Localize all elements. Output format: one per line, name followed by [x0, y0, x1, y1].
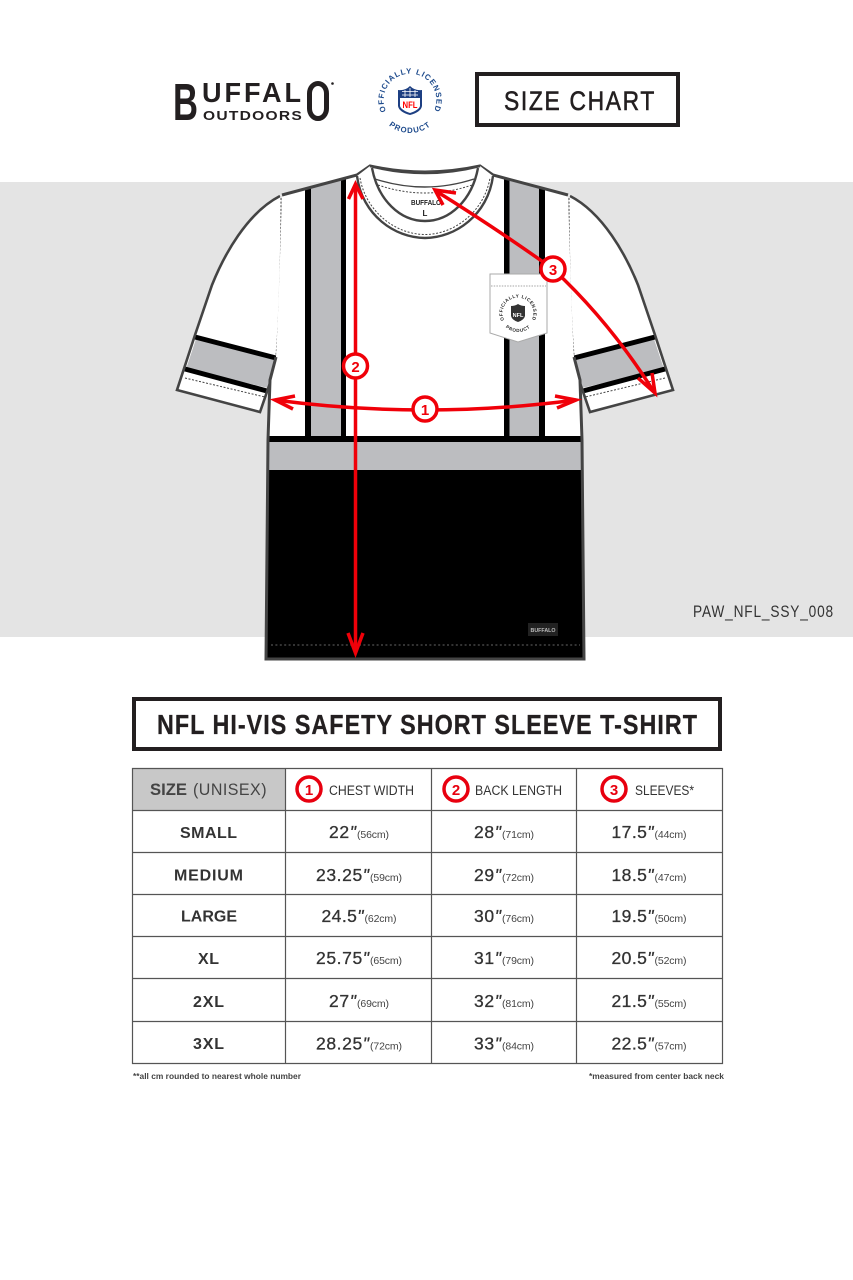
row: small: [180, 822, 686, 842]
row: medium: (72cm): [502, 872, 534, 884]
logo: NFL officially licensed product badge: OFFICIALLY LICENSED: [378, 68, 442, 112]
row: large: [181, 906, 686, 926]
arrow 2: back length: 2: [351, 359, 360, 376]
chest pocket: [490, 274, 548, 342]
size table: [132, 768, 722, 1064]
logo: Buffalo Outdoors: [173, 74, 334, 132]
heading: size chart: [477, 74, 678, 125]
row: small: 22": [329, 822, 357, 842]
row: large: (76cm): [502, 913, 534, 925]
row: 3xl: (72cm): [370, 1040, 402, 1052]
row: 2xl: 21.5": [612, 991, 654, 1011]
row: 3xl: 33": [474, 1034, 502, 1054]
table header: 2: [452, 782, 460, 799]
row: large: 30": [474, 906, 502, 926]
footnote: sleeve measurement: *measured from center back neck: [589, 1072, 725, 1081]
neck tag: L: [423, 209, 428, 218]
row: xl: (52cm): [654, 955, 686, 967]
arrow 3: sleeve length: [435, 190, 655, 393]
hem label: BUFFALO: [530, 628, 556, 634]
row: xl: (65cm): [370, 955, 402, 967]
logo: Buffalo Outdoors: UFFAL: [202, 77, 304, 108]
collar: [357, 166, 493, 238]
row: xl: XL: [198, 951, 219, 968]
logo: NFL officially licensed product badge: [378, 68, 442, 133]
row: 2xl: 27": [329, 991, 357, 1011]
footnote: rounding: **all cm rounded to nearest whole number: [133, 1072, 301, 1081]
grey backdrop band: [0, 182, 853, 637]
heading: size chart: SIZE CHART: [504, 86, 656, 116]
row: large: (62cm): [364, 913, 396, 925]
row: small: (71cm): [502, 829, 534, 841]
arrow 1: chest width: [275, 396, 576, 421]
row: 3xl: 28.25": [316, 1034, 370, 1054]
left sleeve: [177, 196, 281, 412]
row: small: 28": [474, 822, 502, 842]
row: medium: MEDIUM: [174, 868, 243, 884]
table header: 3: [610, 782, 618, 799]
table header: SLEEVES*: [635, 783, 695, 798]
shirt body: [266, 166, 584, 659]
product title: [134, 699, 720, 749]
right sleeve: [569, 196, 673, 412]
row: medium: [174, 865, 686, 885]
table header: SIZE: [150, 780, 187, 799]
row: 2xl: (69cm): [357, 998, 389, 1010]
row: 2xl: 32": [474, 991, 502, 1011]
arrow 2: back length: [344, 184, 368, 653]
row: medium: (47cm): [654, 872, 686, 884]
t-shirt illustration: [175, 164, 675, 660]
row: 3xl: (84cm): [502, 1040, 534, 1052]
table header: BACK LENGTH: [475, 783, 562, 798]
row: 3xl: [193, 1034, 686, 1054]
logo: Buffalo Outdoors: B: [173, 74, 198, 132]
hem label: [528, 623, 558, 636]
logo: NFL officially licensed product badge: NFL: [402, 100, 418, 110]
logo: NFL officially licensed product badge: PRODUCT: [389, 121, 429, 133]
product title: NFL HI-VIS SAFETY SHORT SLEEVE T-SHIRT: [157, 709, 698, 740]
row: 3xl: 3XL: [193, 1036, 224, 1053]
row: large: LARGE: [181, 908, 237, 926]
chest pocket: NFL: [513, 313, 524, 319]
table header: [132, 768, 695, 810]
neck tag: [411, 198, 441, 218]
row: large: (50cm): [654, 913, 686, 925]
chest pocket: OFFICIALLY LICENSED: [499, 294, 537, 321]
row: medium: (59cm): [370, 872, 402, 884]
row: xl: (79cm): [502, 955, 534, 967]
arrow 1: chest width: 1: [421, 402, 429, 419]
row: small: (56cm): [357, 829, 389, 841]
row: 2xl: (81cm): [502, 998, 534, 1010]
row: medium: 29": [474, 865, 502, 885]
row: xl: 31": [474, 948, 502, 968]
row: 3xl: 22.5": [612, 1034, 654, 1054]
row: large: 24.5": [322, 906, 364, 926]
row: 2xl: (55cm): [654, 998, 686, 1010]
row: large: 19.5": [612, 906, 654, 926]
row: 2xl: [193, 991, 686, 1011]
table header: 1: [305, 782, 313, 799]
row: small: SMALL: [180, 825, 237, 842]
neck tag: BUFFALO: [411, 198, 441, 207]
table header: (UNISEX): [193, 780, 267, 799]
row: small: 17.5": [612, 822, 654, 842]
row: xl: 20.5": [612, 948, 654, 968]
table header: CHEST WIDTH: [329, 783, 414, 798]
chest pocket: PRODUCT: [506, 325, 530, 332]
row: 3xl: (57cm): [654, 1040, 686, 1052]
row: small: (44cm): [654, 829, 686, 841]
arrow 3: sleeve length: 3: [549, 262, 557, 279]
logo: Buffalo Outdoors: OUTDOORS: [203, 109, 303, 123]
row: xl: 25.75": [316, 948, 370, 968]
row: medium: 23.25": [316, 865, 370, 885]
row: medium: 18.5": [612, 865, 654, 885]
row: 2xl: 2XL: [193, 994, 224, 1011]
row: xl: [198, 948, 686, 968]
